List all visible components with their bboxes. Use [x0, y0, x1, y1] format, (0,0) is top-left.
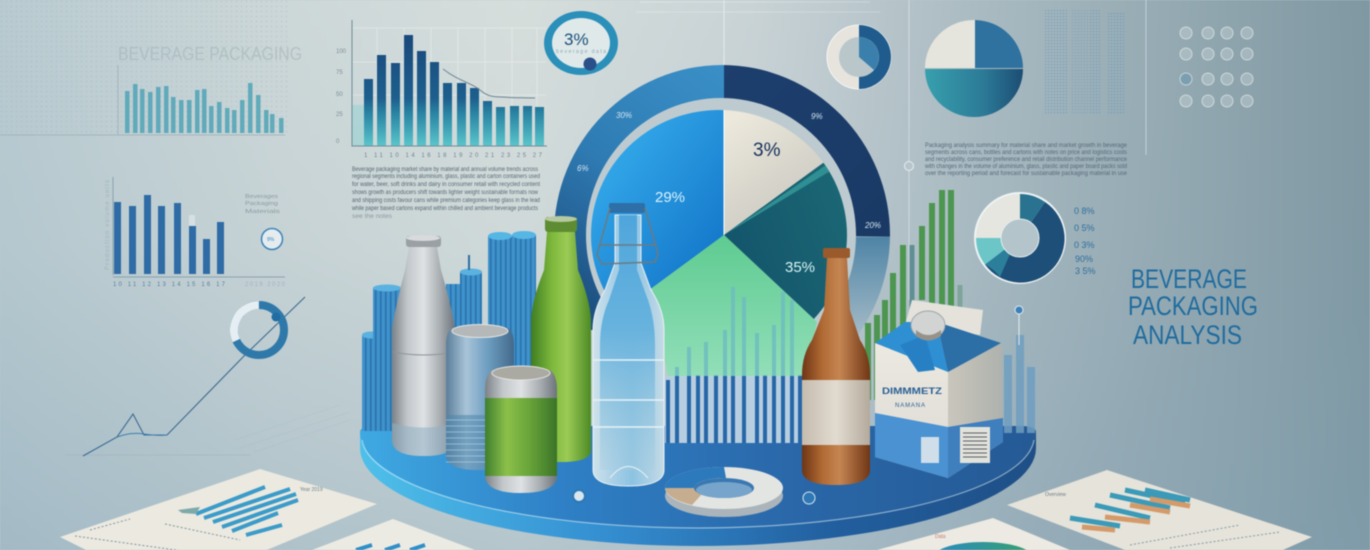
- paragraph: under top chart: while paper based cartons expand within chilled and ambient beverage products: [351, 205, 538, 212]
- paragraph: right: [924, 143, 1128, 177]
- document: centre right: Data: [935, 534, 946, 540]
- ring on platform: [665, 467, 783, 517]
- legend note: middle left: Materials: [245, 209, 281, 215]
- callout badge: 3%: [564, 30, 589, 49]
- document: centre right: [877, 518, 1070, 550]
- donut legend: 3 5%: [1075, 266, 1096, 276]
- document: centre left: [312, 519, 475, 550]
- paragraph: under top chart: Beverage packaging market share by material and annual volume trends across: [352, 166, 538, 173]
- callout badge: [544, 11, 618, 75]
- donut: right: [974, 192, 1066, 284]
- paragraph: right: and recyclability, consumer preference and retail distribution channel performance: [925, 157, 1128, 163]
- donut legend: 90%: [1075, 254, 1093, 264]
- blue bars: right of carton: [1008, 306, 1031, 433]
- ring labels: 6%: [577, 164, 589, 173]
- legend note: middle left: Beverages: [245, 194, 279, 200]
- title: [1128, 264, 1258, 350]
- bar chart: middle left: 10 11 12 13 14 15 16 17: [113, 282, 226, 288]
- green bar group behind carton: [868, 190, 960, 400]
- document: right: Overview: [1045, 492, 1066, 498]
- bar chart: middle left: [105, 177, 286, 288]
- pie: top right: [925, 20, 1023, 117]
- paragraph: under top chart: for water, beer, soft drinks and dairy in consumer retail with recycled content: [352, 181, 540, 188]
- paragraph: right: over the reporting period and forecast for sustainable packaging material in use: [925, 171, 1128, 177]
- bottle: clear swing-top: [593, 203, 664, 486]
- bar chart: top left: [0, 65, 285, 135]
- legend note: middle left: 9%: [267, 237, 275, 243]
- gap behind pie: [586, 98, 856, 372]
- callout badge: beverage data: [556, 49, 606, 55]
- milk carton: NAMANA: [895, 403, 925, 409]
- line chart with donut: [65, 297, 350, 456]
- paragraph: right: segments across cans, bottles and cartons with notes on price and logistics costs: [925, 150, 1127, 156]
- bottle: green: [531, 216, 591, 462]
- bar chart: top centre: 50: [336, 92, 343, 98]
- dotted columns: [1045, 10, 1124, 115]
- document: right: [1007, 470, 1312, 550]
- milk carton: [875, 300, 1003, 478]
- document: left: [60, 469, 377, 550]
- bar chart: middle left: 2019 2020: [245, 282, 286, 288]
- title: PACKAGING: [1128, 291, 1258, 321]
- bar chart: top centre: [336, 20, 547, 159]
- main pie chart: [590, 109, 848, 376]
- document: left: Year 2019: [300, 487, 323, 493]
- milk carton: DIMMMETZ: [882, 386, 943, 396]
- donut legend: [1074, 206, 1096, 276]
- pie ring: [554, 64, 891, 334]
- paragraph: right: Packaging analysis summary for material share and market growth in beverage: [925, 143, 1128, 149]
- main pie chart: 3%: [753, 140, 781, 161]
- paragraph: right: with changes in the volume of aluminium, glass, plastic and paper board packs sold: [924, 164, 1127, 170]
- donut legend: 0 5%: [1074, 223, 1095, 233]
- ring labels: 9%: [811, 112, 823, 121]
- faint top lines: [636, 0, 880, 65]
- faded chart heading: BEVERAGE PACKAGING: [118, 44, 302, 64]
- guide lines: [904, 0, 1146, 300]
- bar chart: top centre: 75: [336, 70, 343, 76]
- paragraph: under top chart: shows growth as producers shift towards lighter weight sustainable formats now: [352, 189, 538, 196]
- platform: [360, 426, 1036, 546]
- icon grid: [1180, 27, 1253, 107]
- ring labels: [577, 111, 881, 230]
- paragraph: under top chart: [351, 166, 540, 220]
- title: ANALYSIS: [1133, 320, 1242, 350]
- donut legend: 0 3%: [1074, 240, 1095, 250]
- marker balls: [573, 490, 815, 504]
- thin bar group: centre: [665, 287, 805, 443]
- can: blue: [446, 324, 514, 470]
- paragraph: under top chart: regional segments including aluminium, glass, plastic and carton containers used: [352, 173, 540, 180]
- ring labels: 30%: [616, 111, 632, 120]
- donut legend: 0 8%: [1074, 206, 1095, 216]
- bottle: brown: [802, 248, 870, 485]
- bar chart: top centre: 25: [336, 112, 343, 118]
- bar chart: middle left: Production volume units: [105, 180, 111, 270]
- legend note: middle left: [245, 194, 282, 250]
- can: green: [485, 366, 557, 493]
- donut: top right small: [827, 25, 891, 89]
- bar chart: top centre: 0: [336, 139, 340, 145]
- title: BEVERAGE: [1131, 264, 1247, 294]
- bottle: silver: [392, 235, 455, 456]
- main pie chart: 35%: [785, 259, 815, 276]
- ring labels: 20%: [864, 221, 881, 230]
- bar chart: top centre: 1 11 10 14 16 18 19 20 21 23 25 27: [364, 153, 543, 159]
- main pie chart: 29%: [655, 189, 685, 206]
- legend note: middle left: Packaging: [245, 201, 278, 207]
- paragraph: under top chart: and shipping costs favour cans while premium categories keep glass in the lead: [352, 197, 540, 204]
- bar chart: top centre: 100: [336, 49, 347, 55]
- blue columns: left: [362, 231, 536, 431]
- paragraph: under top chart: see the notes: [352, 213, 392, 220]
